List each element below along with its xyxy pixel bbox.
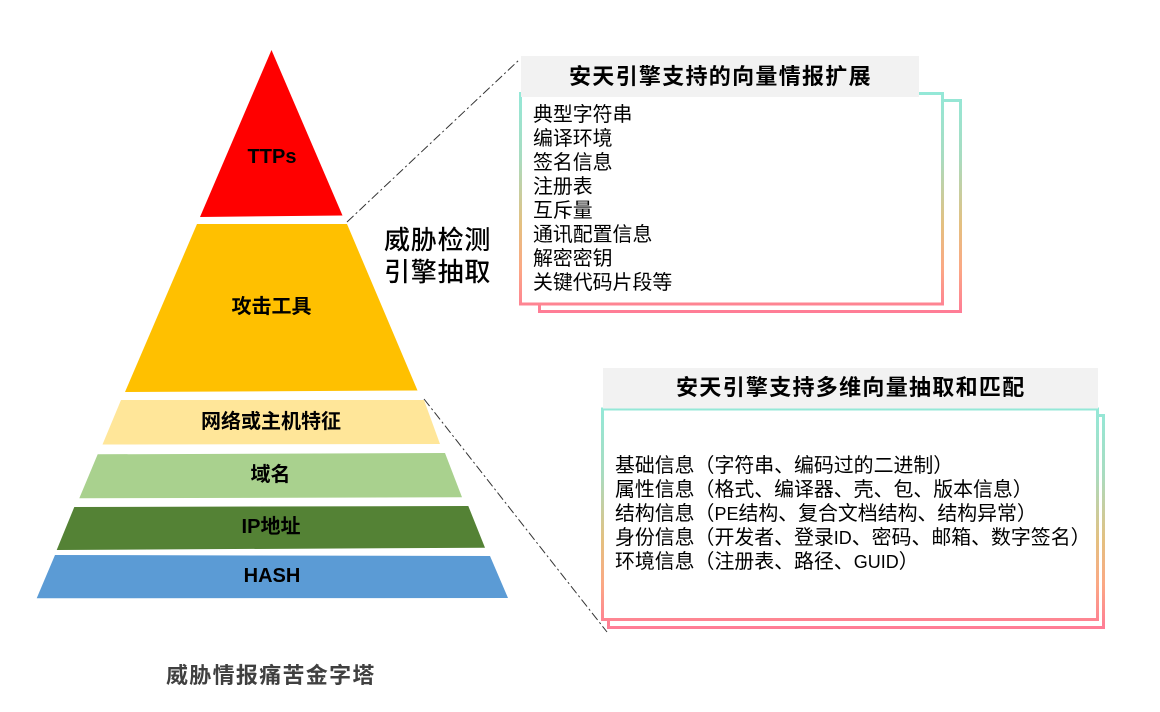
pyramid level: domain name: 域名 — [250, 463, 290, 486]
pyramid level: attack tools: 攻击工具 — [232, 295, 312, 318]
pyramid level: domain name — [79, 453, 462, 498]
pyramid level: network or host features: 网络或主机特征 — [201, 409, 341, 433]
panel list — [533, 103, 672, 294]
connector line: pyramid to bottom panel — [424, 399, 607, 632]
pyramid — [37, 50, 508, 598]
panel list: 结构信息（PE结构、复合文档结构、结构异常） — [615, 502, 1037, 525]
panel heading: 安天引擎支持的向量情报扩展 — [569, 64, 872, 89]
panel list: 签名信息 — [533, 151, 613, 174]
engine extraction label: 威胁检测 — [384, 225, 491, 255]
panel list: 互斥量 — [533, 199, 593, 222]
panel heading: 安天引擎支持多维向量抽取和匹配 — [676, 375, 1026, 400]
pyramid level: HASH — [37, 555, 508, 598]
panel list: 环境信息（注册表、路径、GUID） — [615, 550, 919, 573]
panel back layer — [540, 100, 960, 312]
pyramid level: network or host features — [102, 400, 440, 444]
panel list: 注册表 — [533, 175, 593, 198]
pyramid level: TTPs — [200, 50, 342, 217]
pyramid level: attack tools — [125, 224, 418, 392]
panel list: 基础信息（字符串、编码过的二进制） — [615, 454, 953, 477]
panel heading — [603, 368, 1098, 408]
panel list: 典型字符串 — [533, 103, 632, 126]
pyramid caption: 威胁情报痛苦金字塔 — [166, 663, 376, 688]
panel list — [615, 454, 1090, 573]
panel list: 身份信息（开发者、登录ID、密码、邮箱、数字签名） — [615, 526, 1090, 549]
panel heading — [521, 56, 919, 97]
panel: vector intelligence extension — [520, 56, 960, 312]
pyramid level: HASH: HASH — [244, 565, 300, 587]
panel front layer — [602, 409, 1098, 620]
engine extraction label — [384, 225, 491, 287]
panel list: 属性信息（格式、编译器、壳、包、版本信息） — [615, 478, 1033, 501]
pyramid level: IP address — [57, 506, 485, 550]
engine extraction label: 引擎抽取 — [384, 257, 491, 287]
panel front layer — [520, 94, 942, 304]
panel: multi-dimensional vector extraction and matching — [602, 368, 1104, 628]
panel list: 编译环境 — [533, 127, 613, 150]
pyramid level: IP address: IP地址 — [242, 515, 300, 538]
panel list: 通讯配置信息 — [533, 223, 652, 246]
panel back layer — [608, 416, 1104, 628]
pyramid level: TTPs: TTPs — [248, 146, 296, 168]
connector line: pyramid to top panel — [347, 60, 519, 222]
panel list: 关键代码片段等 — [533, 271, 672, 294]
panel list: 解密密钥 — [533, 247, 613, 270]
